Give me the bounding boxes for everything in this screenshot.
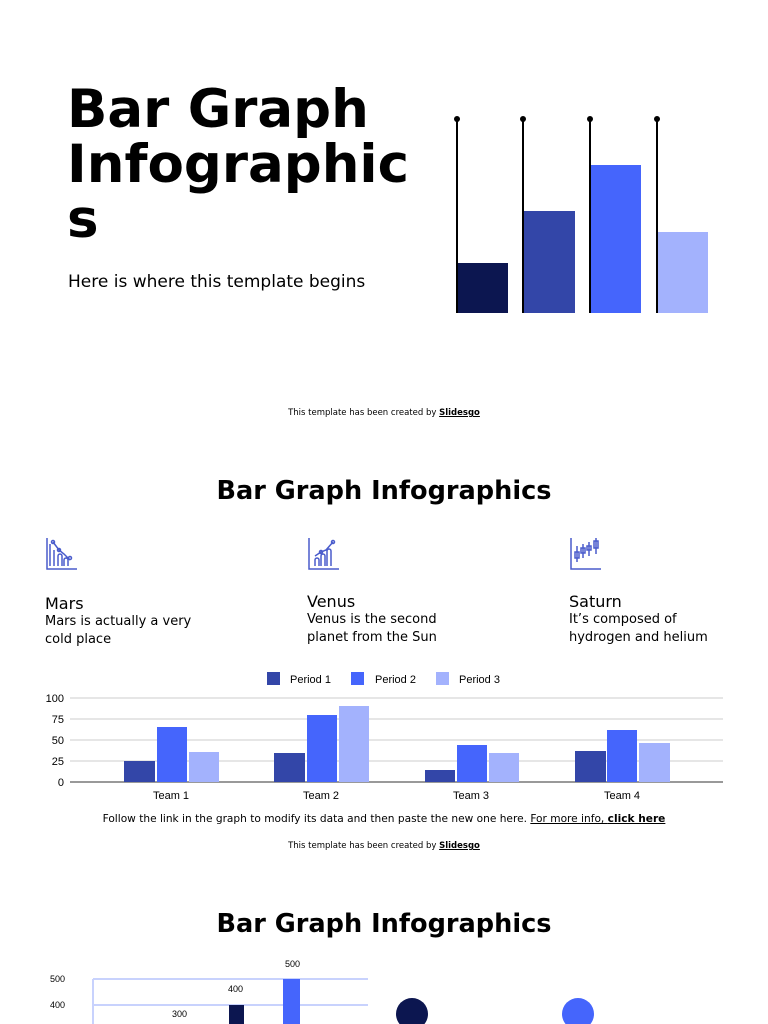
- panel: Venus: Venus is the second: [307, 612, 437, 627]
- panel: Mars: Mars: [45, 594, 84, 613]
- panel: Venus: [307, 538, 437, 645]
- credit: This template has been created by Slidesgo: [288, 408, 480, 418]
- panel: Venus: Venus: [307, 592, 355, 611]
- panel: Saturn: hydrogen and helium: [569, 630, 708, 645]
- grouped bar chart: Period 1: [290, 674, 331, 686]
- panel: Mars: [45, 538, 191, 647]
- credit: This template has been created by Slidesgo: [288, 841, 480, 851]
- panel: Saturn: [569, 538, 708, 645]
- panel: Mars: cold place: [45, 632, 111, 647]
- bottom chart: [50, 959, 594, 1024]
- section title: Bar Graph Infographics: [216, 476, 552, 506]
- grouped bar chart: 0: [58, 777, 64, 789]
- grouped bar chart: Period 2: [375, 674, 416, 686]
- grouped bar chart: Team 2: [303, 790, 339, 802]
- note: Follow the link in the graph to modify its data and then paste the new one here. For more info, click here: [103, 813, 665, 825]
- subtitle: Here is where this template begins: [68, 272, 365, 292]
- grouped bar chart: 50: [52, 735, 64, 747]
- bottom chart: 300: [172, 1009, 187, 1019]
- grouped bar chart: Team 3: [453, 790, 489, 802]
- grouped bar chart: Team 4: [604, 790, 640, 802]
- bottom chart: 400: [50, 1000, 65, 1010]
- panel: Saturn: It’s composed of: [569, 612, 677, 627]
- section title 2: Bar Graph Infographics: [216, 909, 552, 939]
- grouped bar chart: 75: [52, 714, 64, 726]
- bottom chart: 500: [285, 959, 300, 969]
- grouped bar chart: Team 1: [153, 790, 189, 802]
- grouped bar chart: 25: [52, 756, 64, 768]
- grouped bar chart: 100: [46, 693, 64, 705]
- bottom chart: 500: [50, 974, 65, 984]
- title: Bar Graph Infographic s: [67, 79, 409, 250]
- grouped bar chart: [46, 672, 723, 802]
- grouped bar chart: Period 3: [459, 674, 500, 686]
- panel: Mars: Mars is actually a very: [45, 614, 191, 629]
- icon: candlestick: [570, 538, 601, 570]
- bottom chart: 400: [228, 984, 243, 994]
- panel: Saturn: Saturn: [569, 592, 622, 611]
- icon: chart down: [46, 538, 77, 570]
- panel: Venus: planet from the Sun: [307, 630, 437, 645]
- hero bar chart: [454, 116, 708, 313]
- icon: chart up: [308, 538, 339, 570]
